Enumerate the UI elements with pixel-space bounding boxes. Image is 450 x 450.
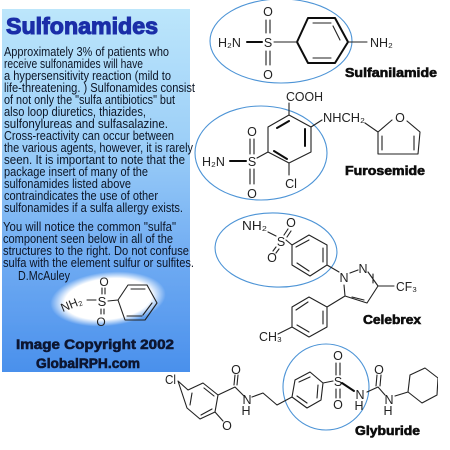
structure: furosemide (195, 90, 425, 201)
label: Sulfanilamide (345, 66, 437, 80)
molecule: H₂N (218, 36, 241, 50)
text block: common sulfa component paragraph (3, 220, 194, 283)
molecule: H (383, 404, 393, 418)
molecule: O (333, 398, 343, 412)
molecule: NH₂ (242, 219, 267, 233)
common sulfa component structure: S (98, 294, 107, 309)
molecule: NH₂ (370, 36, 393, 50)
common sulfa component structure: NH₂ (59, 294, 85, 315)
molecule: O (286, 216, 296, 230)
molecule: H₂N (202, 155, 225, 169)
text block: hypersensitivity paragraph: sulfonamides listed above (4, 177, 131, 191)
panel background (2, 9, 190, 372)
molecule: H (241, 404, 251, 418)
text block: hypersensitivity paragraph: sulfonylureas and sulfasalazine. (4, 117, 168, 131)
molecule: N (355, 388, 365, 402)
structure: sulfanilamide (210, 0, 437, 83)
molecule: N (242, 393, 252, 407)
molecule: S (248, 155, 256, 169)
molecule: S (277, 235, 285, 249)
molecule (242, 216, 417, 344)
molecule: S (334, 375, 342, 389)
text block: common sulfa component paragraph: component seen below in all of the (3, 232, 173, 246)
molecule: O (247, 125, 257, 139)
text block: hypersensitivity paragraph: of not only the "sulfa antibiotics" but (4, 93, 175, 107)
label: Celebrex (363, 313, 421, 327)
common sulfa component structure: O (99, 275, 109, 289)
copyright text: Image Copyright 2002 (16, 336, 174, 352)
highlight oval (213, 210, 339, 290)
molecule: NHCH₂ (323, 111, 365, 125)
molecule: COOH (286, 90, 323, 104)
highlight oval (210, 0, 352, 83)
text block: hypersensitivity paragraph: contraindicates the use of other (4, 189, 158, 203)
molecule: N (384, 393, 394, 407)
text block: common sulfa component paragraph: sulfa with the element sulfur or sulfites. (3, 256, 194, 270)
text block: hypersensitivity paragraph: receive sulfonamides will have (4, 57, 143, 71)
text block: hypersensitivity paragraph: Cross-reactivity can occur between (4, 129, 174, 143)
molecule (218, 5, 393, 82)
common sulfa component structure (47, 266, 169, 332)
molecule: N (358, 262, 368, 276)
website text: GlobalRPH.com (36, 355, 140, 371)
molecule: O (222, 419, 232, 433)
molecule: CF₃ (396, 280, 417, 294)
molecule: O (247, 187, 257, 201)
text block: hypersensitivity paragraph: package insert of many of the (4, 165, 148, 179)
highlight oval (195, 106, 327, 200)
text block: common sulfa component paragraph: D.McAuley (18, 269, 71, 283)
molecule: Cl (285, 177, 297, 191)
molecule: O (333, 349, 343, 363)
molecule: O (374, 363, 384, 377)
text block: hypersensitivity paragraph: seen. It is important to note that the (4, 153, 185, 167)
molecule: O (263, 5, 273, 19)
structure: glyburide (165, 344, 438, 438)
molecule: N (339, 271, 349, 285)
common sulfa component structure: O (96, 315, 106, 329)
text block: common sulfa component paragraph: You will notice the common "sulfa" (3, 220, 176, 234)
text block: hypersensitivity paragraph: life-threatening. ) Sulfonamides consist (4, 81, 195, 95)
title: Sulfonamides (6, 13, 158, 39)
molecule: O (231, 363, 241, 377)
molecule: Cl (165, 373, 176, 387)
molecule: H (354, 399, 364, 413)
molecule (202, 90, 420, 201)
label: Furosemide (345, 164, 425, 178)
molecule: S (264, 36, 272, 50)
text block: hypersensitivity paragraph: a hypersensitivity reaction (mild to (4, 69, 171, 83)
text block: hypersensitivity paragraph: Approximately 3% of patients who (4, 45, 169, 59)
highlight circle (283, 344, 369, 430)
molecule: CH₃ (259, 330, 282, 344)
text block: common sulfa component paragraph: structures to the right. Do not confuse (3, 244, 189, 258)
panel: sulfonamides description (2, 9, 195, 372)
molecule: O (263, 68, 273, 82)
text block: hypersensitivity paragraph: sulfonamides if a sulfa allergy exists. (4, 201, 183, 215)
structure: celebrex (213, 210, 421, 344)
molecule: O (267, 251, 277, 265)
molecule (165, 349, 438, 433)
text block: hypersensitivity paragraph (4, 45, 195, 215)
molecule: O (395, 111, 405, 125)
text block: hypersensitivity paragraph: also loop diuretics, thiazides, (4, 105, 146, 119)
text block: hypersensitivity paragraph: the various agents, however, it is rarely (4, 141, 194, 155)
label: Glyburide (355, 424, 420, 438)
